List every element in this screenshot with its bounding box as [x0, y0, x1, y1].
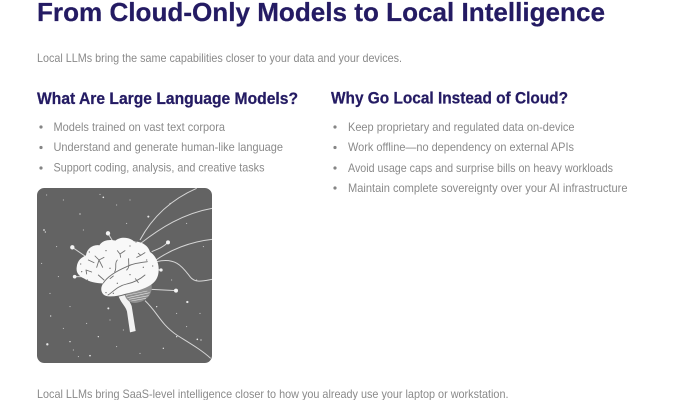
- neural connection lines: [72, 188, 212, 358]
- brain stem: [119, 295, 136, 332]
- bullet list: reasons to go local: Maintain complete sovereignty over your AI infrastructure: [348, 182, 628, 195]
- cerebellum: [125, 284, 152, 303]
- star field: [41, 194, 204, 357]
- heading: what are LLMs: What Are Large Language Models?: [37, 90, 298, 108]
- subtitle: Local LLMs bring the same capabilities closer to your data and your devices.: [37, 52, 402, 65]
- bullet list: LLM facts: Understand and generate human-like language: [54, 141, 283, 154]
- bullet list: LLM facts: Support coding, analysis, and creative tasks: [54, 162, 265, 174]
- bullet list: LLM facts: [39, 121, 283, 174]
- bullet list: reasons to go local: Avoid usage caps and surprise bills on heavy workloads: [348, 162, 613, 175]
- image background: [37, 188, 212, 363]
- connection nodes: [70, 231, 178, 293]
- bullet list: reasons to go local: [333, 121, 628, 195]
- heading: why go local: Why Go Local Instead of Cloud?: [331, 90, 568, 108]
- bullet list: reasons to go local: Work offline—no dependency on external APIs: [348, 141, 574, 154]
- bullet list: LLM facts: Models trained on vast text corpora: [54, 121, 226, 134]
- brain surface dots: [80, 241, 153, 294]
- illustration: glowing brain with neural connections: [37, 188, 212, 363]
- bullet list: reasons to go local: Keep proprietary and regulated data on-device: [348, 121, 574, 134]
- panel: what are large language models: [37, 90, 298, 363]
- brain: [77, 238, 159, 296]
- panel: why go local: [331, 90, 628, 195]
